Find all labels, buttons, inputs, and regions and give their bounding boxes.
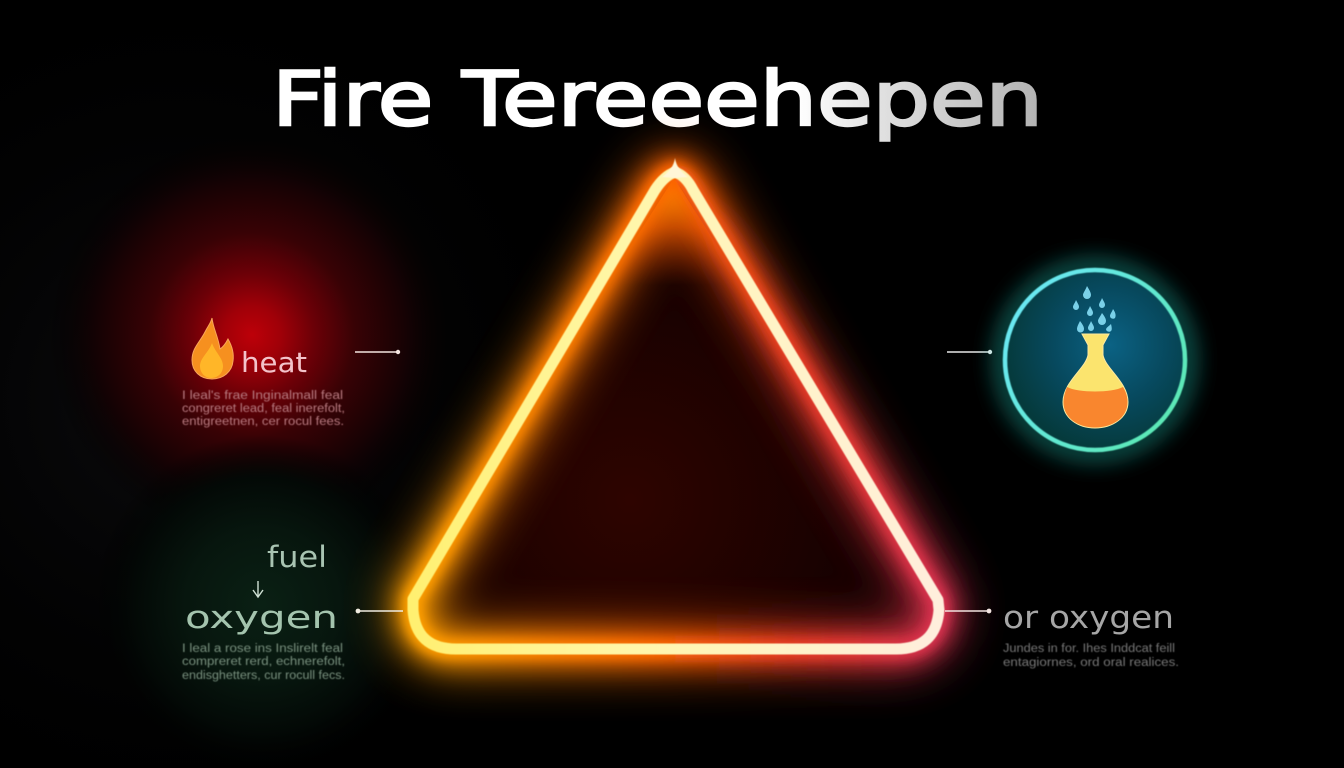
title: Fire Tereeehepen <box>272 55 1043 143</box>
arrow: heat pointer <box>355 350 400 354</box>
text block: oxygen description: I leal a rose ins Inslirelt feal <box>182 643 343 655</box>
mid glow <box>413 172 939 649</box>
near glow <box>413 172 939 649</box>
flask body <box>1063 334 1128 428</box>
text block: heat description: congreret lead, feal inerefolt, <box>182 403 345 415</box>
heat block <box>182 318 345 428</box>
text block: oxygen description <box>182 643 345 682</box>
flask liquid <box>1064 387 1128 428</box>
wide glow <box>413 172 939 649</box>
fire triangle <box>413 158 939 649</box>
water drops <box>1073 286 1116 333</box>
background smoke haze <box>0 0 800 768</box>
arrow: flask pointer <box>947 350 992 354</box>
text block: oxygen description: compreret rerd, echnerefolt, <box>182 656 345 668</box>
label: oxygen: oxygen <box>185 600 338 636</box>
text block: oxygen description: endisghetters, cur rocull fecs. <box>182 670 345 682</box>
label: or oxygen: or oxygen <box>1003 600 1174 636</box>
apex spike <box>662 158 688 178</box>
text block: or oxygen description: entagiornes, ord oral realices. <box>1003 657 1179 669</box>
circle fill <box>1005 270 1185 450</box>
bright core <box>413 172 939 649</box>
icon: flame <box>192 318 233 379</box>
text block: or oxygen description <box>1003 643 1179 669</box>
circle outer glow <box>1003 268 1187 452</box>
label: fuel: fuel <box>267 540 327 574</box>
apex inner glow <box>606 178 742 285</box>
icon: flask in circle <box>1003 268 1187 452</box>
arrow: oxygen pointer <box>356 609 403 613</box>
panel: heat glow <box>40 125 460 545</box>
text block: or oxygen description: Jundes in for. Ihes Inddcat feill <box>1003 643 1175 655</box>
arrow: right oxygen pointer <box>945 609 991 613</box>
circle ring <box>1005 270 1185 450</box>
triangle interior <box>418 185 934 642</box>
or oxygen block <box>1003 600 1179 669</box>
label: heat: heat <box>241 346 307 379</box>
arrow: fuel down <box>253 581 263 597</box>
panel: oxygen glow <box>85 435 415 768</box>
text block: heat description <box>182 390 345 428</box>
oxygen block <box>182 600 345 682</box>
text block: heat description: I leal's frae Inginalmall feal <box>182 390 343 402</box>
text block: heat description: entigreetnen, cer rocul fees. <box>182 416 344 428</box>
